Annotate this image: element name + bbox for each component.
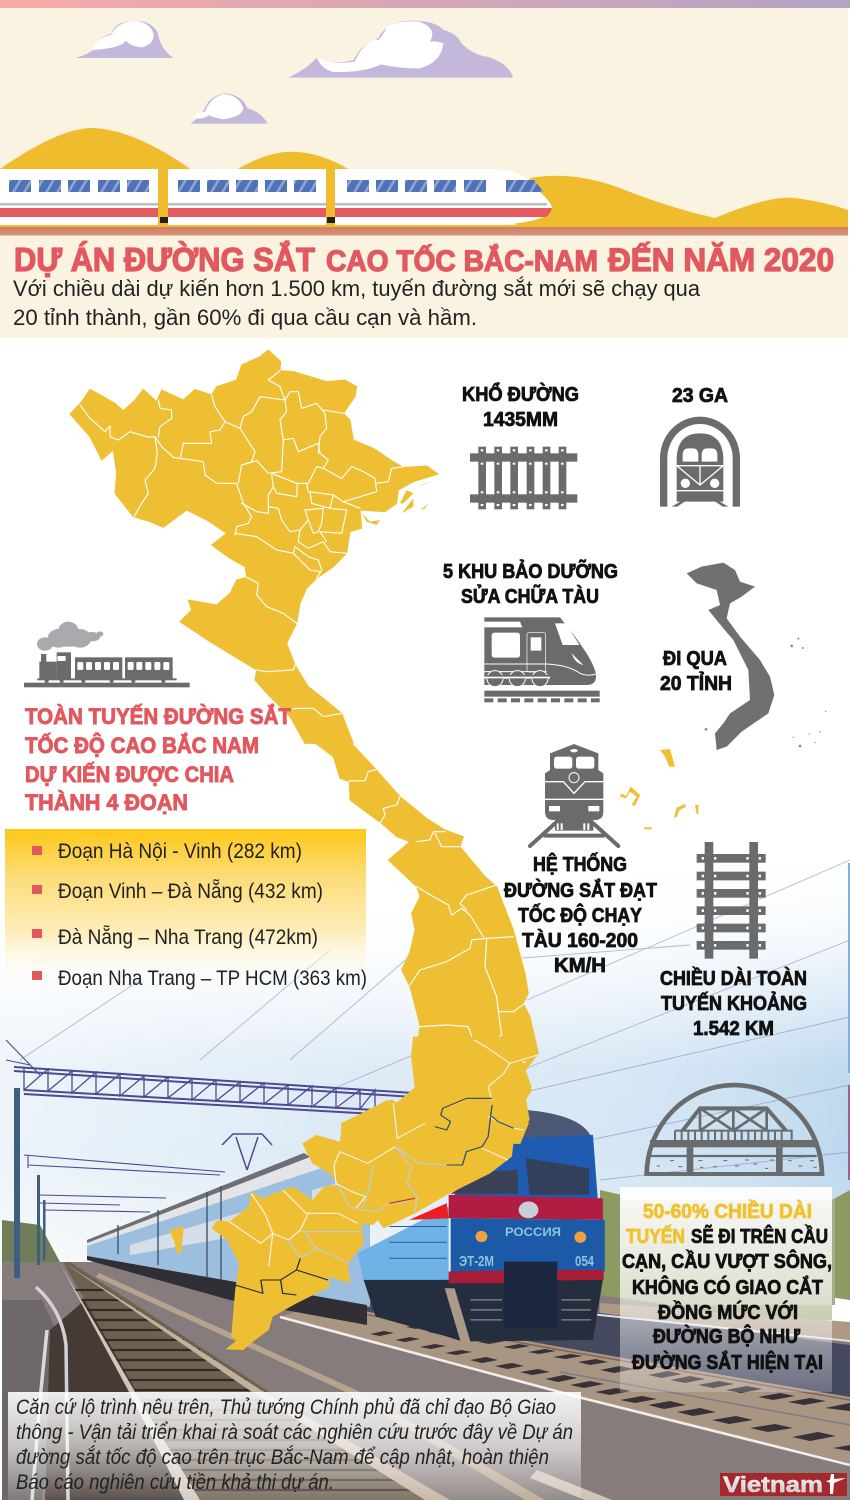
label: total length	[660, 967, 807, 1040]
locomotive markings	[459, 1225, 594, 1270]
callout text: CẠN, CẦU VƯỢT SÔNG,	[622, 1249, 832, 1273]
callout text: TUYẾN	[626, 1225, 685, 1248]
list bullets	[32, 846, 42, 980]
label: speed	[504, 852, 657, 977]
heading: four sections	[25, 704, 292, 815]
note text: đường sắt tốc độ cao trên trục Bắc-Nam để cập nhật, hoàn thiện	[16, 1446, 549, 1469]
label: track gauge: 1435MM	[483, 409, 558, 431]
icon: bridge	[644, 1085, 824, 1175]
label: maintenance depots	[443, 559, 618, 608]
label: provinces: ĐI QUA	[663, 648, 727, 670]
carriages	[87, 1130, 370, 1325]
icon: horizontal track	[470, 447, 577, 509]
label: provinces	[660, 648, 732, 695]
list items: Đà Nẵng – Nha Trang (472km)	[58, 926, 318, 949]
heading: four sections: THÀNH 4 ĐOẠN	[25, 790, 188, 815]
list items	[58, 840, 367, 990]
panel: directive note	[8, 1392, 581, 1500]
map: southern provinces	[169, 1037, 538, 1350]
distant trees and far field	[2, 1220, 60, 1310]
title: CAO TỐC BẮC-NAM	[326, 244, 598, 278]
note text: Căn cứ lộ trình nêu trên, Thủ tướng Chính phủ đã chỉ đạo Bộ Giao	[16, 1396, 556, 1419]
callout text: ĐƯỜNG SẮT HIỆN TẠI	[632, 1350, 823, 1374]
callout text: 50-60% CHIỀU DÀI	[643, 1200, 812, 1223]
heading: four sections: TỐC ĐỘ CAO BẮC NAM	[25, 732, 259, 758]
near tracks	[2, 1262, 612, 1500]
map: Vietnam provinces	[70, 350, 538, 1350]
ground	[2, 1262, 850, 1500]
icon: vertical track	[697, 842, 766, 959]
label: stations: 23 GA	[672, 385, 728, 407]
logo: Vietnam+: Vietnam	[723, 1472, 823, 1497]
photo: railway background	[0, 860, 850, 1500]
icon: high-speed train	[0, 169, 552, 227]
icon: tunnel train	[660, 417, 740, 507]
label: total length: TUYẾN KHOẢNG	[661, 992, 807, 1015]
top gradient bar	[0, 0, 850, 8]
label: total length: CHIỀU DÀI TOÀN	[660, 967, 807, 990]
panel: segment list	[5, 829, 367, 990]
list items: Đoạn Hà Nội - Vinh (282 km)	[58, 840, 302, 863]
poles	[14, 1088, 46, 1278]
list items: Đoạn Vinh – Đà Nẵng (432 km)	[58, 880, 323, 903]
locomotive markings: РОССИЯ	[505, 1225, 561, 1239]
note text: Báo cáo nghiên cứu tiền khả thi dự án.	[16, 1471, 334, 1494]
label: provinces: 20 TỈNH	[660, 672, 732, 695]
icon: clouds	[76, 21, 513, 124]
label: speed: TỐC ĐỘ CHẠY	[518, 903, 643, 927]
subtitle: 20 tỉnh thành, gần 60% đi qua cầu cạn và hầm.	[13, 305, 477, 330]
icon: locomotive front	[530, 744, 618, 846]
map: northern provinces	[70, 350, 438, 743]
map: central provinces	[300, 732, 538, 1143]
icon: steam train	[24, 622, 190, 687]
locomotive	[358, 1110, 605, 1342]
sky wires	[20, 860, 850, 1225]
title	[14, 241, 834, 278]
logo: Vietnam+	[720, 1472, 847, 1497]
title: ĐẾN NĂM 2020	[608, 242, 834, 278]
list items: Đoạn Nha Trang – TP HCM (363 km)	[58, 967, 367, 990]
label: track gauge	[462, 382, 579, 431]
callout text	[622, 1200, 832, 1374]
heading: four sections: TOÀN TUYẾN ĐƯỜNG SẮT	[25, 704, 292, 729]
label: total length: 1.542 KM	[693, 1018, 774, 1040]
callout text: SẼ ĐI TRÊN CẦU	[691, 1224, 828, 1248]
panel: bridges callout	[620, 1187, 832, 1392]
note text: thông - Vận tải triển khai rà soát các nghiên cứu trước đây về Dự án	[16, 1421, 573, 1444]
icon: bullet train	[484, 617, 600, 702]
label: speed: ĐƯỜNG SẮT ĐẠT	[504, 878, 657, 902]
callout text: ĐỒNG MỨC VỚI	[658, 1300, 798, 1324]
panel: header scene	[0, 8, 848, 338]
note text	[16, 1396, 573, 1494]
label: maintenance depots: SỬA CHỮA TÀU	[461, 584, 599, 608]
callout text: KHÔNG CÓ GIAO CẮT	[632, 1275, 823, 1299]
label: maintenance depots: 5 KHU BẢO DƯỠNG	[443, 559, 618, 583]
overhead gantry	[6, 1040, 413, 1212]
subtitle	[13, 276, 701, 330]
label: speed: TÀU 160-200	[522, 929, 638, 952]
label: track gauge: KHỔ ĐƯỜNG	[462, 382, 579, 406]
icon: Vietnam grey map	[687, 563, 826, 750]
right track band	[280, 1303, 850, 1465]
icon: offshore islands	[618, 749, 698, 829]
label: speed: KM/H	[554, 955, 606, 977]
label: speed: HỆ THỐNG	[533, 852, 627, 876]
locomotive markings: 054	[575, 1253, 594, 1270]
locomotive markings: ЭТ-2М	[459, 1253, 494, 1270]
hills	[0, 128, 848, 227]
callout text: ĐƯỜNG BỘ NHƯ	[653, 1324, 800, 1348]
title: DỰ ÁN ĐƯỜNG SẮT	[14, 241, 315, 278]
heading: four sections: DỰ KIẾN ĐƯỢC CHIA	[25, 762, 234, 787]
subtitle: Với chiều dài dự kiến hơn 1.500 km, tuyến đường sắt mới sẽ chạy qua	[13, 276, 701, 301]
